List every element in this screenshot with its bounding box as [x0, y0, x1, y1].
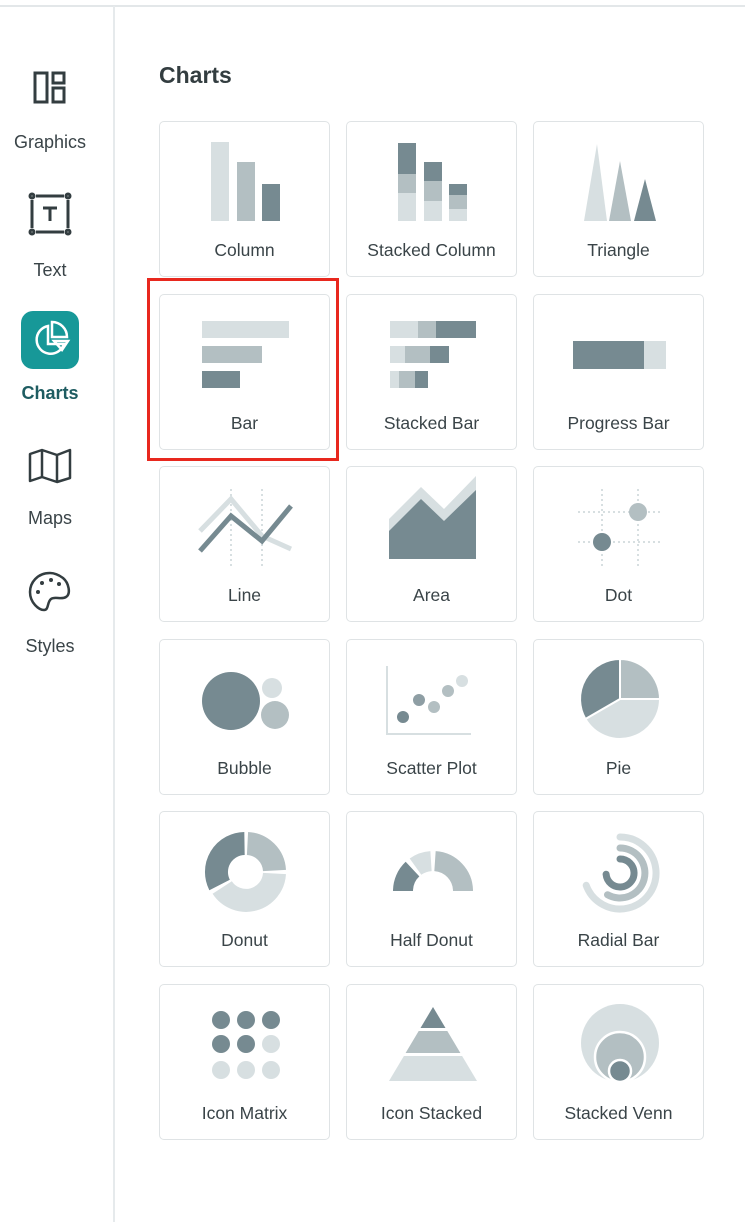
- card: Icon Matrix: [159, 984, 330, 1140]
- card: Donut: Donut: [221, 930, 268, 950]
- card: Donut: [159, 811, 330, 967]
- nav: Graphics: Graphics: [14, 132, 86, 152]
- card: Line: Line: [228, 585, 261, 605]
- icon: stacked column: [398, 143, 467, 221]
- card: Radial Bar: Radial Bar: [578, 930, 659, 950]
- icon: radial bar: [582, 834, 660, 913]
- card: Stacked Venn: [533, 984, 704, 1140]
- icon: bar chart: [202, 321, 289, 388]
- nav: Maps: [28, 448, 72, 528]
- icon: half donut: [393, 851, 473, 891]
- card: Bar: [159, 294, 330, 450]
- card: Area: [346, 466, 517, 622]
- icon: column chart: [211, 142, 280, 221]
- heading: Charts: Charts: [159, 62, 232, 88]
- card: Icon Stacked: Icon Stacked: [381, 1103, 482, 1123]
- icon: icon matrix: [212, 1011, 280, 1079]
- card: Half Donut: [346, 811, 517, 967]
- icon: area chart: [389, 476, 476, 559]
- icon: bubble chart: [202, 672, 289, 730]
- icon: pie chart: [581, 660, 659, 738]
- card: Half Donut: Half Donut: [390, 930, 473, 950]
- nav: Charts (active): Charts: [21, 383, 78, 403]
- nav: Styles: [25, 572, 75, 656]
- icon: progress bar: [573, 341, 666, 369]
- icon: charts: [21, 311, 79, 369]
- card: Stacked Column: Stacked Column: [367, 240, 496, 260]
- icon: stacked bar: [390, 321, 476, 388]
- card: Stacked Column: [346, 121, 517, 277]
- card: Triangle: Triangle: [587, 240, 650, 260]
- card: Area: Area: [413, 585, 450, 605]
- nav: Graphics: [14, 72, 86, 152]
- card: Scatter Plot: Scatter Plot: [386, 758, 477, 778]
- card: Line: [159, 466, 330, 622]
- card: Bar: Bar: [231, 413, 258, 433]
- card: Column: [159, 121, 330, 277]
- card: Triangle: [533, 121, 704, 277]
- highlight: red box around Bar: [147, 278, 339, 461]
- card: Stacked Venn: Stacked Venn: [564, 1103, 672, 1123]
- card: Column: Column: [214, 240, 275, 260]
- nav: Text: Text: [33, 260, 66, 280]
- icon: text: [28, 192, 72, 236]
- card: Icon Matrix: Icon Matrix: [202, 1103, 287, 1123]
- icon: donut chart: [205, 832, 286, 912]
- card: Pie: [533, 639, 704, 795]
- card: Bubble: Bubble: [217, 758, 272, 778]
- nav: Charts (active): [21, 311, 79, 403]
- icon: stacked triangle: [389, 1007, 477, 1081]
- nav: Maps: Maps: [28, 508, 72, 528]
- card: Progress Bar: [533, 294, 704, 450]
- icon: graphics: [34, 72, 66, 104]
- nav: Styles: Styles: [25, 636, 75, 656]
- icon: stacked venn: [581, 1004, 659, 1081]
- icon: scatter plot: [386, 666, 471, 735]
- icon: palette: [28, 572, 70, 612]
- card: Stacked Bar: Stacked Bar: [384, 413, 479, 433]
- card: Dot: [533, 466, 704, 622]
- icon: triangle chart: [584, 144, 656, 221]
- nav: Text: [28, 192, 72, 280]
- card: Dot: Dot: [605, 585, 632, 605]
- card: Radial Bar: [533, 811, 704, 967]
- card: Pie: Pie: [606, 758, 631, 778]
- card: Icon Stacked: [346, 984, 517, 1140]
- icon: dot chart: [578, 489, 660, 566]
- card: Scatter Plot: [346, 639, 517, 795]
- card: Stacked Bar: [346, 294, 517, 450]
- icon: maps: [28, 448, 72, 484]
- card: Progress Bar: Progress Bar: [567, 413, 670, 433]
- icon: line chart: [198, 489, 293, 566]
- card: Bubble: [159, 639, 330, 795]
